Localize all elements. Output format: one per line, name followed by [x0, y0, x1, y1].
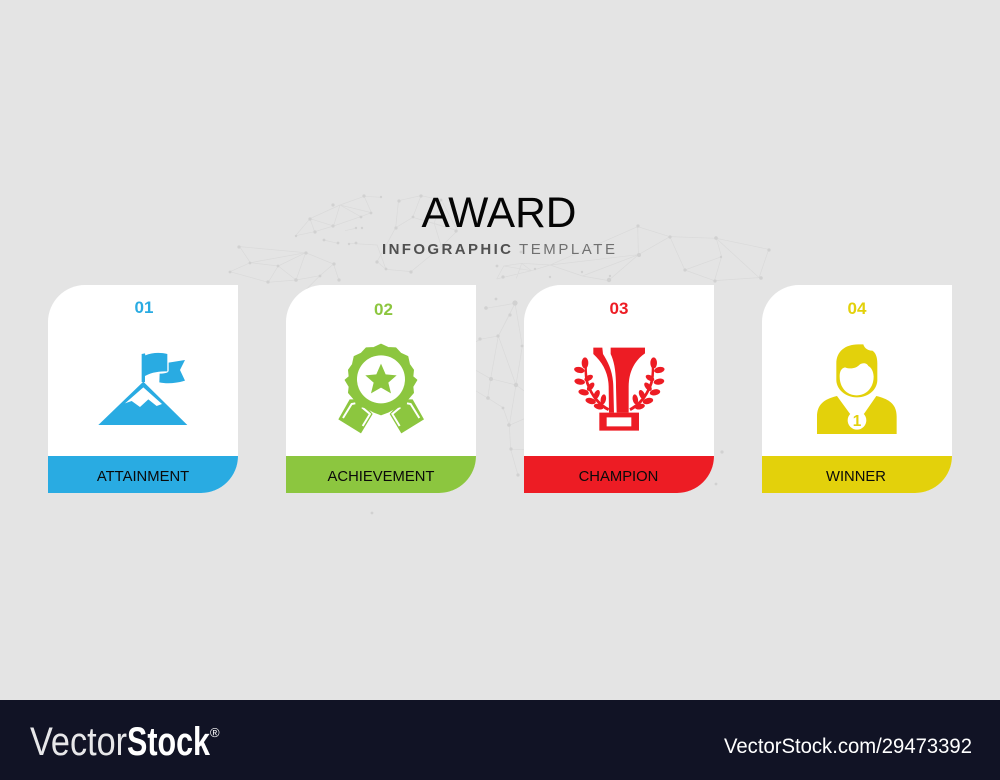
- label: winner: WINNER: [826, 469, 886, 485]
- panel: winner: [762, 285, 952, 493]
- number 02: 02: [374, 300, 393, 319]
- subtitle: [382, 241, 615, 258]
- footer logo: Stock: [127, 720, 211, 764]
- subtitle: TEMPLATE: [519, 241, 615, 258]
- label: achievement: ACHIEVEMENT: [328, 469, 434, 485]
- icon: rosette badge: [338, 344, 424, 433]
- label band: champion: [524, 456, 714, 493]
- panel: champion: [524, 285, 714, 493]
- number 04: 04: [848, 299, 867, 318]
- background: network world map: [229, 194, 771, 514]
- footer bar: [0, 700, 1000, 780]
- footer logo: [30, 720, 220, 764]
- footer stock id: VectorStock.com/29473392: [724, 734, 972, 758]
- number 03: 03: [610, 299, 628, 318]
- footer logo: ®: [210, 725, 220, 740]
- panel: attainment: [48, 285, 238, 493]
- label band: winner: [762, 456, 952, 493]
- panel: achievement: [286, 285, 476, 493]
- footer logo: Vector: [30, 720, 127, 764]
- icon: person with medal: [817, 344, 897, 434]
- number 01: 01: [135, 298, 153, 317]
- icon: trophy with laurel: [573, 348, 665, 431]
- title: AWARD: [422, 190, 576, 237]
- icon: person with medal: 1: [853, 413, 862, 430]
- label band: attainment: [48, 456, 238, 493]
- label: champion: CHAMPION: [579, 469, 658, 485]
- icon: mountain with flag: [98, 353, 187, 425]
- label band: achievement: [286, 456, 476, 493]
- label: attainment: ATTAINMENT: [97, 469, 189, 485]
- subtitle: INFOGRAPHIC: [382, 241, 511, 258]
